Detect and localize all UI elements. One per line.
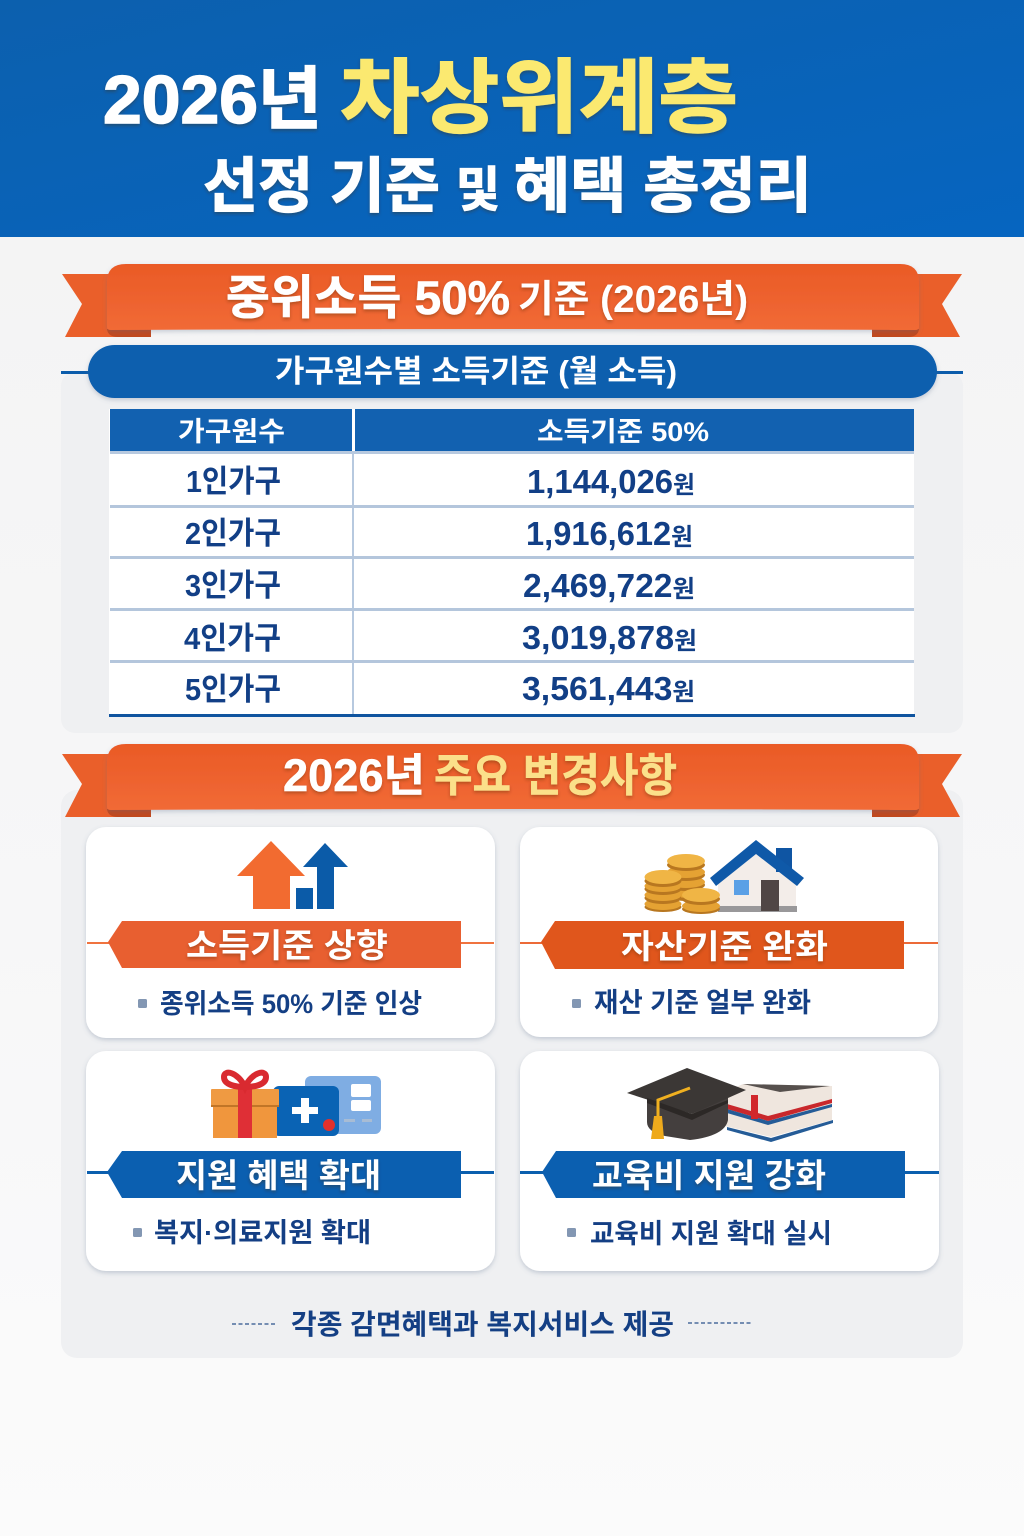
table: income standards [109,409,915,717]
row: 2 people [185,515,693,552]
label banner [87,1151,494,1198]
label banner: 소득기준 상향 [186,927,388,964]
label banner [520,921,938,969]
icon: up arrows [237,841,348,909]
header banner [0,0,1024,237]
ribbon: key changes heading [62,744,962,817]
ribbon: median income heading: 중위소득 50% [226,271,510,324]
row: 1 person: 1,144,026원 [527,463,695,500]
table header [110,409,914,454]
icon: gift and cards [211,1073,381,1138]
row: 2 people: 1,916,612원 [526,515,693,552]
row: 1 person: 1인가구 [186,464,281,499]
table header: 소득기준 50% [537,417,709,447]
ribbon: key changes heading: 주요 변경사항 [434,750,677,801]
bullet text: 교육비 지원 확대 실시 [590,1219,832,1249]
label banner [87,921,494,968]
ribbon: median income heading [62,264,962,337]
title: 선정 기준 [203,153,440,220]
card: asset standard eased [520,827,938,1037]
card: education cost support strengthened [520,1051,939,1271]
row: 4 people [184,619,697,656]
title: 2026년 [103,62,322,138]
label banner: 지원 혜택 확대 [176,1157,381,1194]
pill heading: income by household size [61,345,963,398]
title: 차상위계층 [340,54,738,144]
panel: income table background [61,372,963,733]
panel: key changes background [61,790,963,1358]
row: 5 people: 5인가구 [185,672,281,707]
row: 3 people [185,567,695,604]
table header: 가구원수 [178,417,285,447]
row: 5 people [185,670,695,707]
row: 4 people: 3,019,878원 [522,619,697,656]
label banner: 자산기준 완화 [621,928,828,965]
bullet text: 복지·의료지원 확대 [154,1218,371,1248]
title: 및 [456,164,500,217]
label banner: 교육비 지원 강화 [592,1157,826,1194]
ribbon: key changes heading: 2026년 [283,750,425,801]
row: 4 people: 4인가구 [184,621,281,656]
title: 혜택 총정리 [514,153,812,220]
ribbon: median income heading: 기준 (2026년) [518,279,748,321]
bullet text: 종위소득 50% 기준 인상 [160,989,422,1019]
card: income standard raised [86,827,495,1038]
bullet text: 재산 기준 얼부 완화 [594,988,811,1018]
row: 3 people: 3인가구 [185,568,281,603]
label banner [520,1151,939,1198]
icon: coins and house [644,840,804,914]
row: 2 people: 2인가구 [185,516,281,551]
card: support benefits expanded [86,1051,495,1271]
pill heading: income by household size: 가구원수별 소득기준 (월 소득) [275,354,677,389]
row: 3 people: 2,469,722원 [523,567,695,604]
footer note: 각종 감면혜택과 복지서비스 제공 [291,1309,674,1340]
icon: graduation cap and books [627,1068,833,1142]
row: 5 people: 3,561,443원 [522,670,695,707]
title [103,54,812,220]
row: 1 person [186,463,695,500]
